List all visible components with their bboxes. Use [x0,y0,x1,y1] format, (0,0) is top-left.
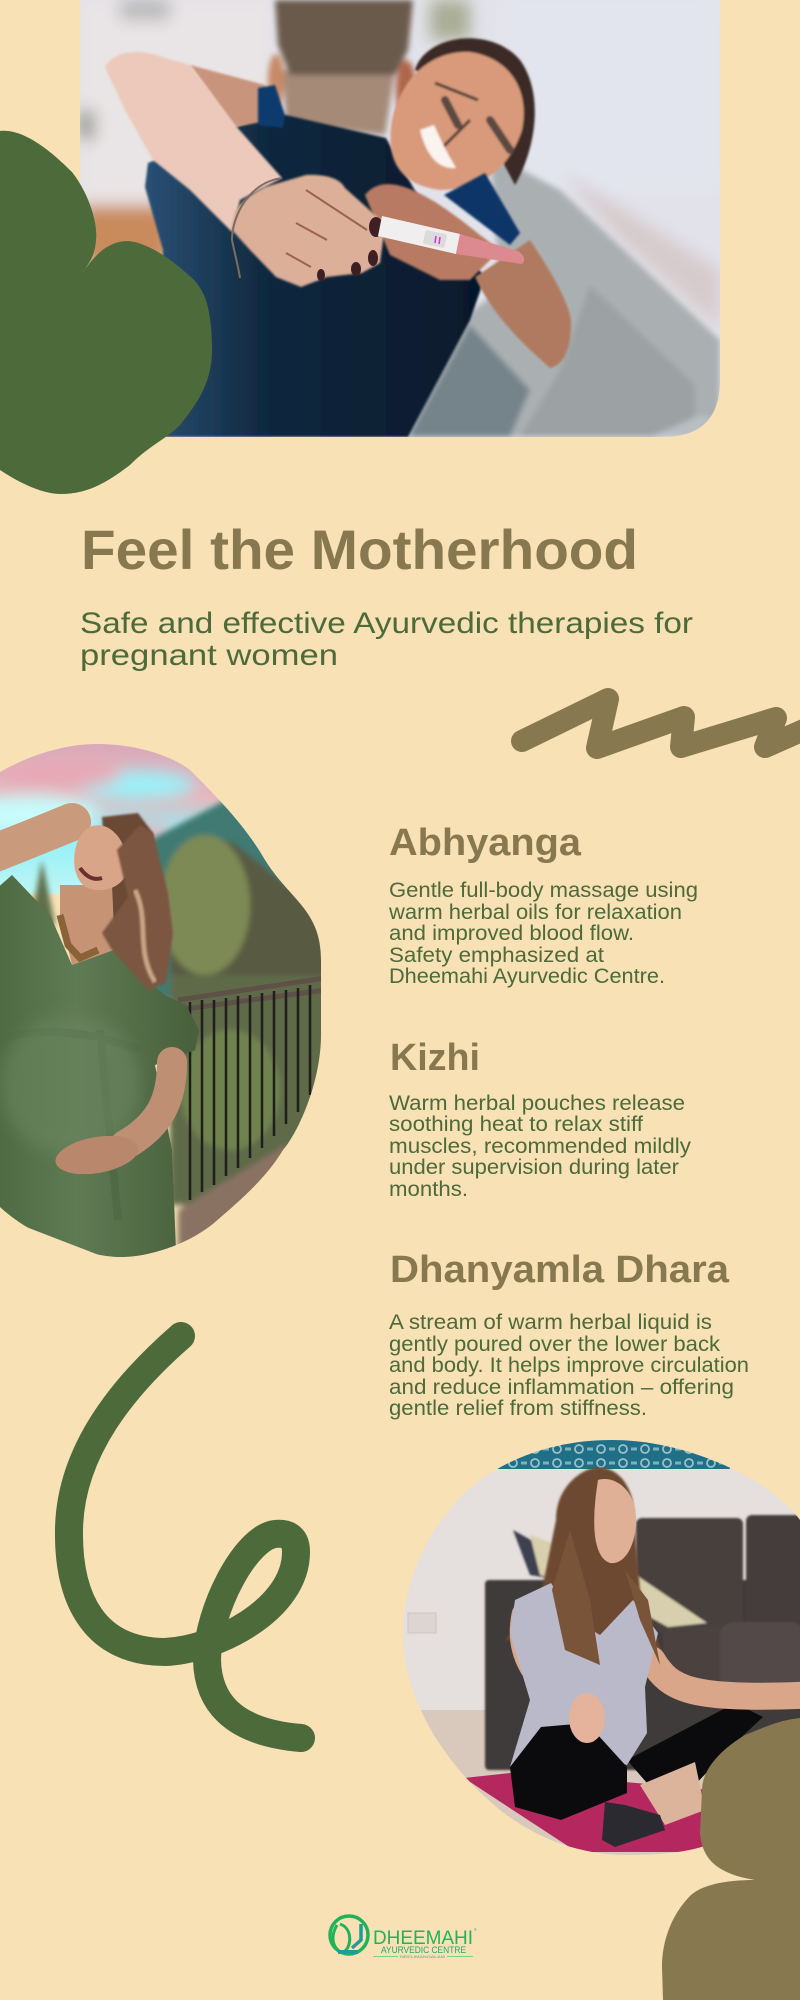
title: Feel the Motherhood [81,518,638,581]
decorative brown blob bottom right [662,1718,800,2000]
woman's far arm behind neck [190,65,272,127]
text block: Dhanyamla Dhara: and reduce inflammation – offering [389,1376,734,1399]
belly [0,1024,138,1146]
belt [110,1169,117,1220]
green dress [0,875,199,1262]
logo: Dheemahi Ayurvedic Centre: ® [474,1927,477,1932]
woman's face and hair [390,38,535,190]
text block: Abhyanga: Dheemahi Ayurvedic Centre. [389,965,665,988]
text block: Dhanyamla Dhara: Dhanyamla Dhara [390,1249,730,1291]
woman's forearm and hand [53,1062,172,1180]
woman's face [594,1479,636,1563]
decorative green squiggle [69,1336,301,1738]
man's shirt [145,115,485,437]
text block: Kizhi: months. [389,1178,468,1201]
woman's far sleeve [258,85,285,128]
fingernails [317,217,383,281]
text block: Kizhi: Kizhi [390,1037,480,1079]
subtitle: Safe and effective Ayurvedic therapies for [80,607,693,640]
text block: Kizhi: under supervision during later [389,1156,679,1179]
decorative green blob top left [0,131,212,494]
yoga mat [464,1772,710,1852]
woman's hand on chest [365,184,500,280]
woman's front hair [102,825,173,990]
woman's far leg [629,1708,763,1782]
woman's hair over shirt [552,1530,660,1665]
woman's arms [523,1615,800,1722]
text block: Abhyanga: and improved blood flow. [389,922,634,945]
text block: Abhyanga [388,822,698,988]
photo: couple hugging with pregnancy test [80,0,720,437]
logo: Dheemahi Ayurvedic Centre: AYURVEDIC CENTRE [381,1945,466,1955]
text block: Kizhi: muscles, recommended mildly [389,1135,692,1158]
mountain and trees [30,795,330,1260]
logo: Dheemahi Ayurvedic Centre: NEELIMANGALAM [400,1955,445,1959]
logo text: DHEEMAHI [373,1928,473,1949]
patterned wall band [497,1440,730,1469]
woman's resting hand [569,1693,605,1743]
text block: Dhanyamla Dhara [389,1249,749,1420]
woman's neck and chest [60,885,115,965]
text block: Abhyanga: Safety emphasized at [389,944,604,967]
woman's raised arm [105,52,282,232]
hair highlights [135,890,155,982]
decorative brown zigzag [522,699,800,748]
floor [421,1710,706,1855]
pregnancy test stick [378,216,524,264]
subtitle: pregnant women [80,639,338,672]
woman's face [74,825,128,890]
woman's shin [640,1762,705,1825]
finger gaps [286,190,367,267]
woman's near knee [510,1723,627,1820]
text block: Abhyanga: Gentle full-body massage using [389,879,698,902]
fence [178,978,325,1200]
woman's hair back [505,1466,662,1651]
logo: Dheemahi Ayurvedic Centre [330,1916,477,1959]
photo: pregnant woman in green dress [0,744,330,1262]
woman's shirt and belly [510,1583,658,1767]
bracelet [232,178,282,278]
subtitle [80,607,693,672]
sofa [485,1515,800,1770]
logo mark [330,1916,368,1954]
woman's back hair [100,812,155,920]
text block: Kizhi [389,1037,692,1201]
text block: Dhanyamla Dhara: gently poured over the lower back [389,1333,721,1356]
text block: Dhanyamla Dhara: gentle relief from stiffness. [389,1397,647,1420]
woman's raised arm [0,822,72,855]
necklace [60,915,98,958]
text block: Dhanyamla Dhara: A stream of warm herbal liquid is [389,1311,712,1334]
woman's hand [232,175,384,287]
woman's smile [80,868,102,879]
text block: Dhanyamla Dhara: and body. It helps improve circulation [389,1354,749,1377]
woman's shoes [602,1802,665,1847]
man's hair and neck [268,0,416,135]
woman's right forearm [475,240,571,368]
text block: Abhyanga: warm herbal oils for relaxation [388,901,682,924]
photo: pregnant woman meditating [400,1435,800,1860]
text block: Kizhi: Warm herbal pouches release [389,1092,685,1115]
text block: Kizhi: soothing heat to relax stiff [389,1113,643,1136]
woman's near sleeve [444,173,520,245]
text block: Abhyanga: Abhyanga [389,822,582,864]
wall socket [408,1613,436,1633]
